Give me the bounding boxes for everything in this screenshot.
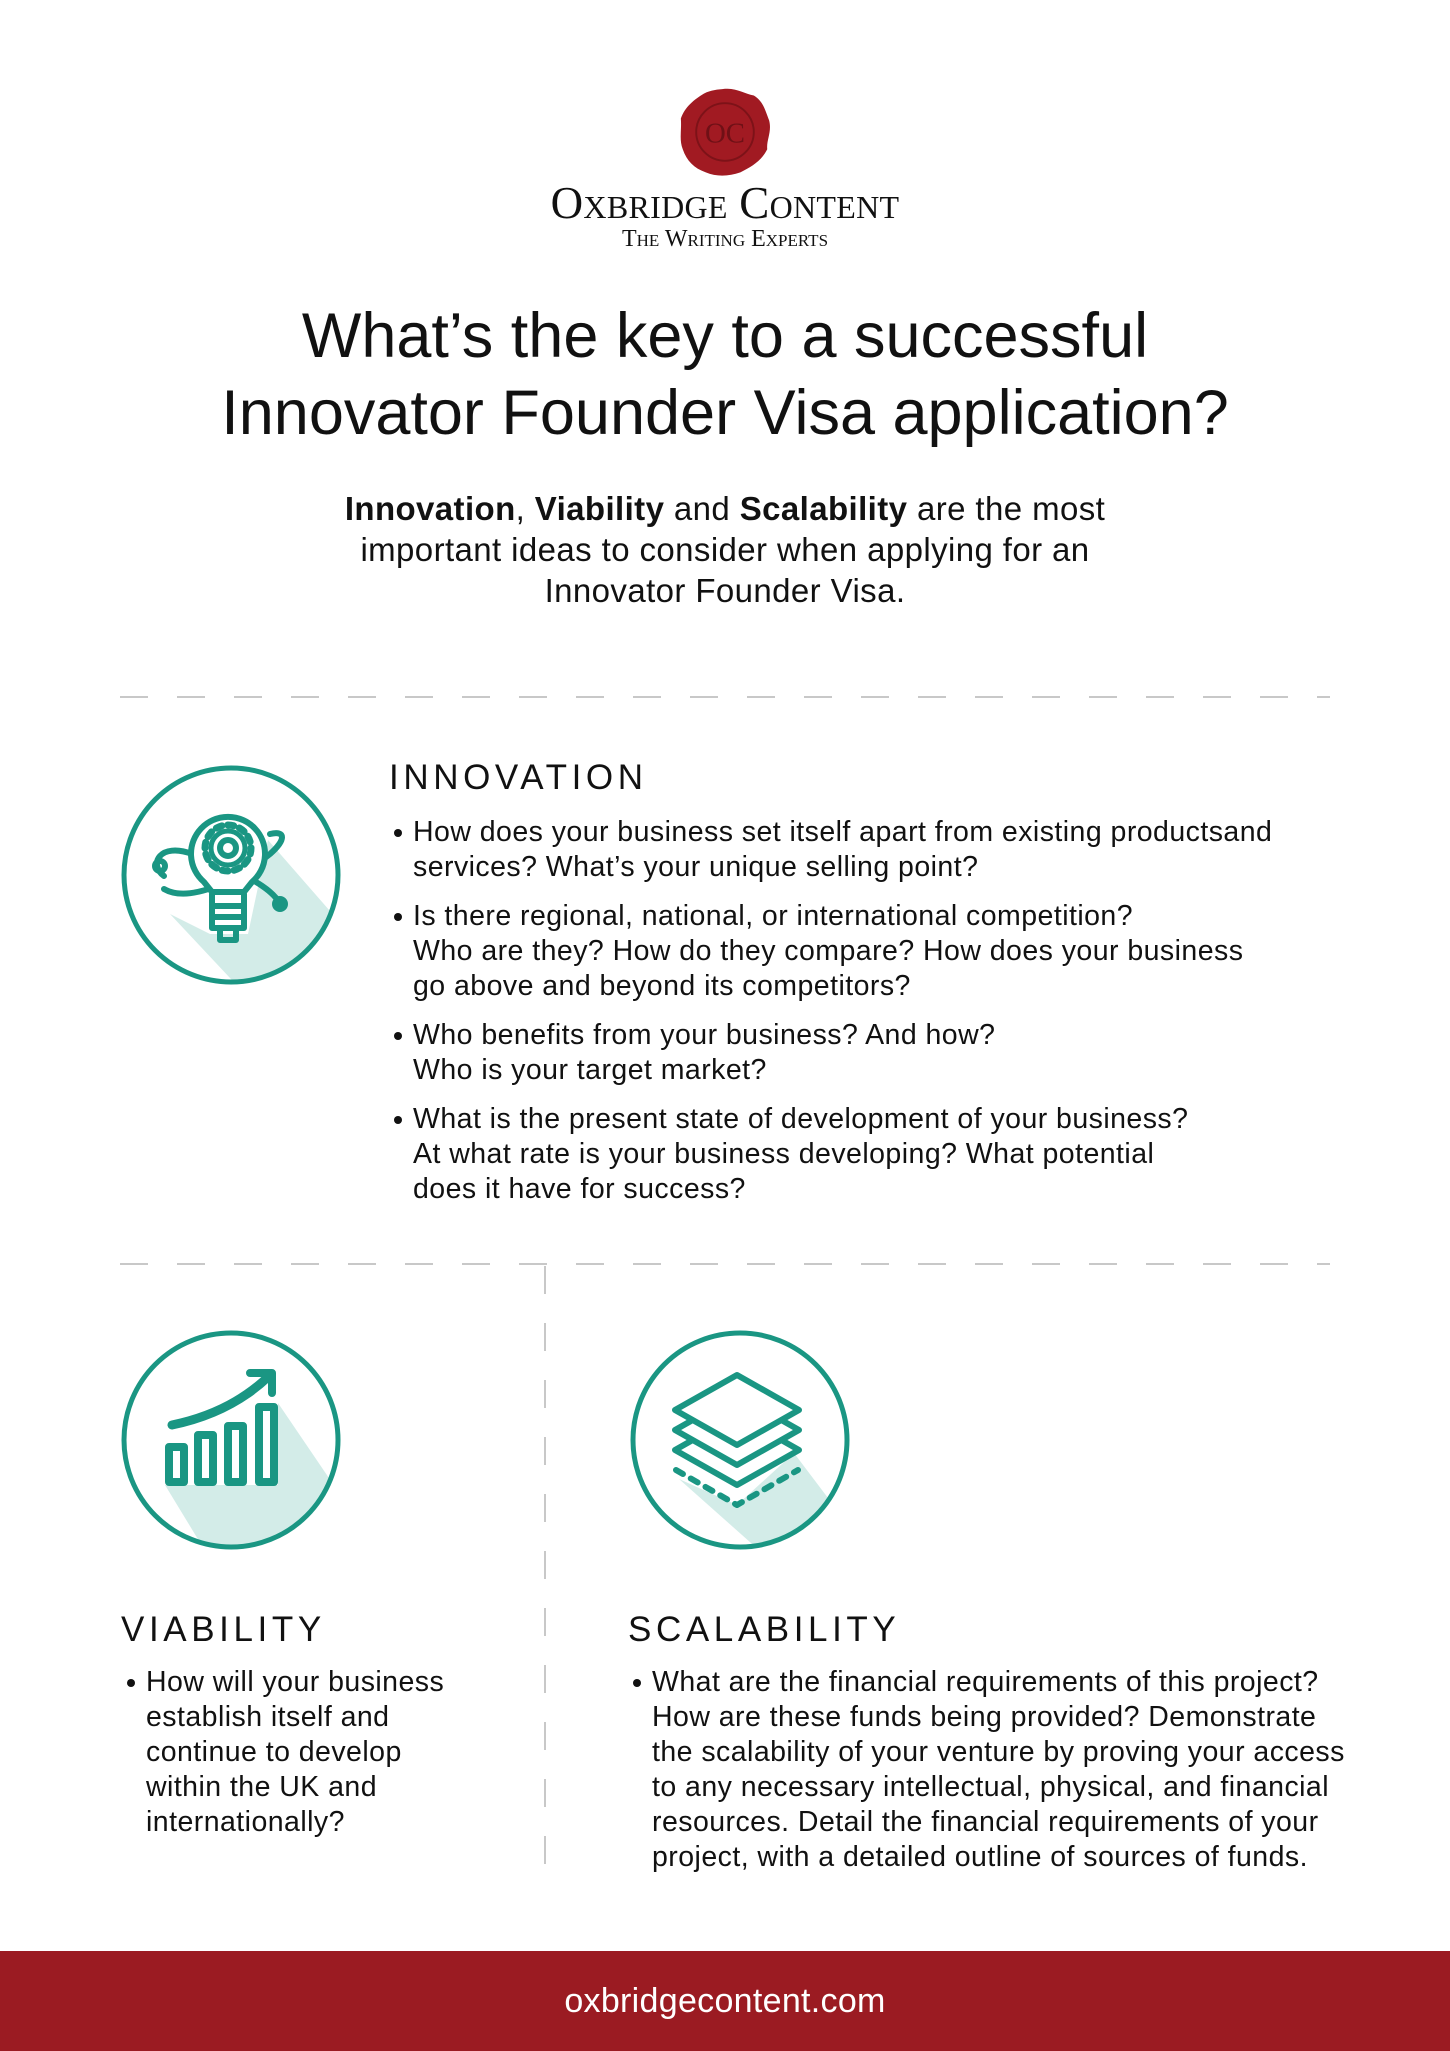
brand name: Oxbridge Content: [551, 178, 899, 228]
heading: scalability: SCALABILITY: [628, 1610, 900, 1649]
icon: wax seal: [680, 88, 770, 176]
icon: scalability layers: [630, 1330, 850, 1550]
icon: innovation lightbulb: [122, 766, 340, 984]
icon: wax seal: OC: [705, 118, 745, 150]
viability bullets: establish itself and: [146, 1701, 389, 1733]
intro text: [345, 490, 1105, 609]
scalability bullets: How are these funds being provided? Demonstrate: [652, 1701, 1316, 1733]
footer: [0, 1951, 1450, 2051]
innovation bullets: Who is your target market?: [413, 1054, 767, 1086]
innovation bullets: At what rate is your business developing? What potential: [413, 1138, 1154, 1170]
innovation bullets: [394, 816, 1272, 1205]
innovation bullets: How does your business set itself apart from existing productsand: [413, 816, 1272, 848]
innovation bullets: Is there regional, national, or international competition?: [413, 900, 1133, 932]
scalability bullets: resources. Detail the financial requirements of your: [652, 1806, 1319, 1838]
viability bullets: within the UK and: [146, 1771, 377, 1803]
heading: innovation: INNOVATION: [389, 758, 648, 797]
scalability bullets: project, with a detailed outline of sources of funds.: [652, 1841, 1308, 1873]
title: [221, 301, 1229, 448]
tagline: The Writing Experts: [622, 226, 828, 252]
viability bullets: How will your business: [146, 1666, 444, 1698]
scalability bullets: [633, 1666, 1345, 1873]
intro text: Innovation, Viability and Scalability are the most: [345, 490, 1105, 527]
scalability bullets: to any necessary intellectual, physical, and financial: [652, 1771, 1329, 1803]
innovation bullets: services? What’s your unique selling point?: [413, 851, 978, 883]
title: What’s the key to a successful: [302, 301, 1148, 371]
icon: viability chart: [122, 1330, 340, 1550]
intro text: Innovator Founder Visa.: [545, 572, 905, 609]
innovation bullets: does it have for success?: [413, 1173, 746, 1205]
innovation bullets: What is the present state of development of your business?: [413, 1103, 1188, 1135]
intro text: important ideas to consider when applying for an: [360, 531, 1090, 568]
viability bullets: [127, 1666, 444, 1838]
scalability bullets: the scalability of your venture by proving your access: [652, 1736, 1345, 1768]
scalability bullets: What are the financial requirements of this project?: [652, 1666, 1319, 1698]
logo: [551, 88, 899, 252]
innovation bullets: go above and beyond its competitors?: [413, 970, 911, 1002]
viability bullets: continue to develop: [146, 1736, 402, 1768]
innovation bullets: Who benefits from your business? And how?: [413, 1019, 995, 1051]
viability bullets: internationally?: [146, 1806, 345, 1838]
footer: oxbridgecontent.com: [564, 1982, 886, 2020]
innovation bullets: Who are they? How do they compare? How does your business: [413, 935, 1243, 967]
title: Innovator Founder Visa application?: [221, 378, 1229, 448]
heading: viability: VIABILITY: [121, 1610, 326, 1649]
